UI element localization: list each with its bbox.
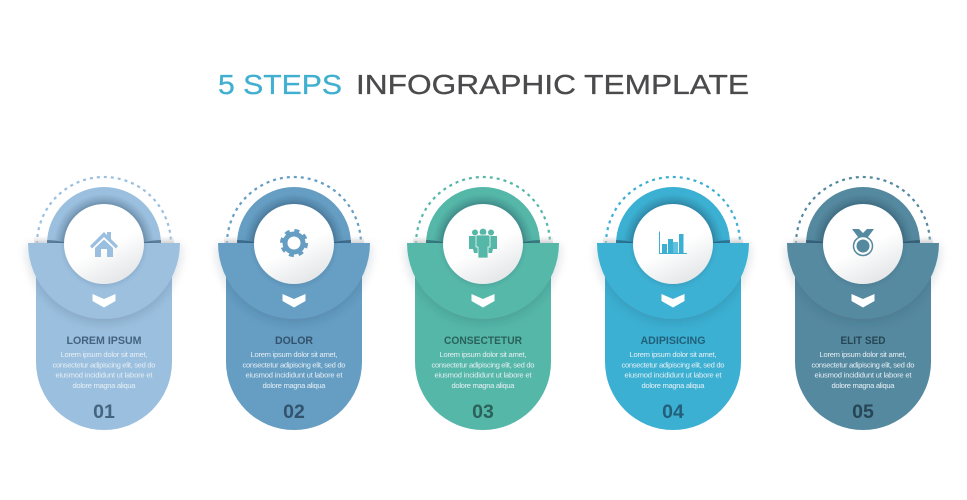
panel: step 03 [407, 177, 559, 430]
text block: eiusmod incididunt ut labore et [56, 370, 153, 380]
panel: step 05 [787, 177, 939, 430]
chevron [662, 294, 684, 308]
text block: consectetur adipiscing elit, sed do [432, 360, 534, 370]
text block: consectetur adipiscing elit, sed do [812, 360, 914, 370]
panel: step 04 [597, 177, 749, 430]
half disc [218, 243, 370, 319]
number: 01 [93, 401, 115, 423]
card body [795, 244, 931, 430]
text block: eiusmod incididunt ut labore et [434, 370, 532, 380]
icon: gear [282, 230, 306, 256]
number: 02 [283, 401, 305, 423]
heading: LOREM IPSUM [66, 335, 142, 347]
text block: dolore magna aliqua [262, 381, 326, 390]
white circle [633, 204, 713, 284]
heading: ELIT SED [840, 335, 886, 347]
card body [415, 244, 551, 430]
dashed arc [37, 177, 171, 244]
dashed arc [416, 177, 550, 244]
half disc [597, 243, 749, 319]
text block: dolore magna aliqua [72, 381, 136, 390]
white circle [64, 204, 144, 284]
heading: DOLOR [275, 335, 313, 347]
icon: medal [852, 229, 874, 256]
arch [237, 187, 351, 244]
text block: Lorem ipsum dolor sit amet, [440, 350, 526, 359]
text block: Lorem ipsum dolor sit amet, [250, 350, 338, 359]
text block: eiusmod incididunt ut labore et [814, 370, 912, 380]
title: INFOGRAPHIC TEMPLATE [356, 69, 749, 100]
heading: ADIPISICING [640, 335, 706, 347]
number: 03 [472, 401, 494, 423]
text block: dolore magna aliqua [642, 381, 705, 390]
title: 5 STEPS [218, 69, 342, 100]
text block [242, 350, 346, 390]
text block: consectetur adipiscing elit, sed do [242, 360, 346, 370]
chevron [282, 294, 306, 308]
text block: Lorem ipsum dolor sit amet, [630, 350, 716, 359]
dashed arc [227, 177, 361, 244]
white circle [823, 204, 903, 284]
number: 05 [852, 401, 874, 423]
white circle [443, 204, 523, 284]
dashed arc [796, 177, 930, 244]
text block [622, 350, 724, 390]
icon: house [90, 232, 118, 257]
arch [47, 187, 161, 244]
card body [605, 244, 741, 430]
text block: consectetur adipiscing elit, sed do [622, 360, 724, 370]
chevron [852, 294, 874, 308]
arch [806, 187, 920, 244]
card body [36, 244, 172, 430]
chevron [472, 294, 494, 308]
card body [226, 244, 362, 430]
number: 04 [662, 401, 684, 423]
half disc [787, 243, 939, 319]
title [218, 69, 749, 100]
panel: step 01 [28, 177, 180, 430]
icon: bar chart [659, 232, 687, 254]
chevron [92, 294, 116, 308]
text block: dolore magna aliqua [832, 381, 895, 390]
arch [426, 187, 540, 244]
icon: people [469, 229, 497, 258]
text block: dolore magna aliqua [452, 381, 515, 390]
text block: eiusmod incididunt ut labore et [624, 370, 722, 380]
panel: step 02 [218, 177, 370, 430]
heading: CONSECTETUR [444, 335, 522, 347]
dashed arc [606, 177, 740, 244]
text block [52, 350, 156, 390]
text block: consectetur adipiscing elit, sed do [52, 360, 156, 370]
half disc [407, 243, 559, 319]
text block [432, 350, 534, 390]
arch [616, 187, 730, 244]
text block: eiusmod incididunt ut labore et [246, 370, 343, 380]
half disc [28, 243, 180, 319]
text block: Lorem ipsum dolor sit amet, [60, 350, 148, 359]
white circle [254, 204, 334, 284]
text block [812, 350, 914, 390]
text block: Lorem ipsum dolor sit amet, [820, 350, 906, 359]
